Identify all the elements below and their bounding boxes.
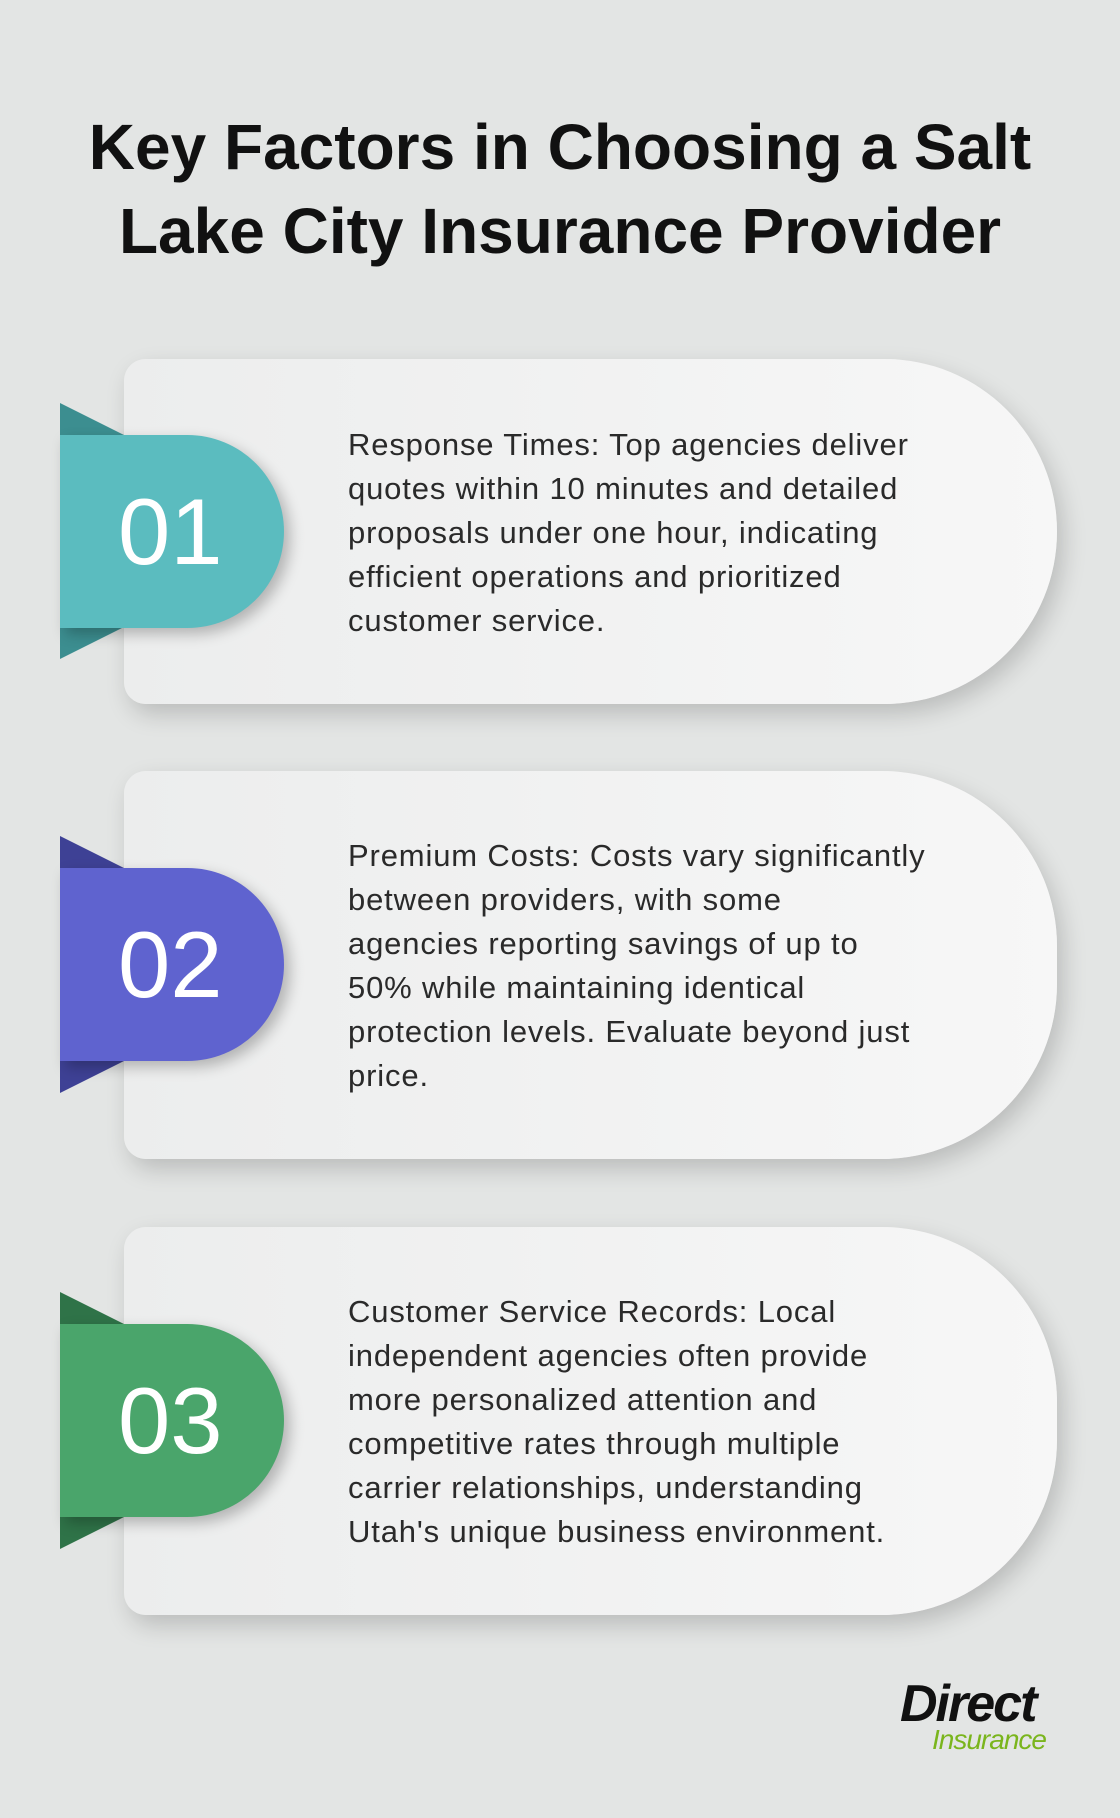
number 03: 03 [118,1368,223,1473]
flap 2 bottom [60,1061,124,1093]
text 3 [348,1294,885,1549]
logo [900,1675,1046,1755]
panel: card 2 [124,771,1057,1159]
text 2: 50% while maintaining identical [348,970,805,1005]
text 2: Premium Costs: Costs vary significantly [348,838,926,873]
flap 1 bottom [60,627,124,659]
number 01: 01 [118,479,223,584]
number 03 [60,1324,284,1517]
flap 2 top [60,836,124,868]
panel: card 1 [124,359,1057,704]
flap 3 bottom [60,1517,124,1549]
text 2: price. [348,1058,429,1093]
flap 1 top [60,403,124,435]
title: Key Factors in Choosing a Salt [89,111,1031,183]
number 02 [60,868,284,1061]
panel: card 3 [124,1227,1057,1615]
text 2 [348,838,926,1093]
title: Lake City Insurance Provider [119,195,1001,267]
text 1: quotes within 10 minutes and detailed [348,471,898,506]
text 2: agencies reporting savings of up to [348,926,859,961]
logo: Direct [900,1675,1035,1733]
text 3: Utah's unique business environment. [348,1514,885,1549]
text 1: Response Times: Top agencies deliver [348,427,909,462]
text 2: between providers, with some [348,882,782,917]
text 3: competitive rates through multiple [348,1426,840,1461]
flap 3 top [60,1292,124,1324]
text 1: proposals under one hour, indicating [348,515,878,550]
text 1: customer service. [348,603,605,638]
logo: Insurance [932,1724,1046,1755]
text 3: more personalized attention and [348,1382,817,1417]
text 1 [348,427,909,638]
number 02: 02 [118,912,223,1017]
text 1: efficient operations and prioritized [348,559,842,594]
text 3: carrier relationships, understanding [348,1470,863,1505]
text 3: Customer Service Records: Local [348,1294,836,1329]
text 3: independent agencies often provide [348,1338,868,1373]
title [89,111,1031,267]
text 2: protection levels. Evaluate beyond just [348,1014,910,1049]
number 01 [60,435,284,628]
